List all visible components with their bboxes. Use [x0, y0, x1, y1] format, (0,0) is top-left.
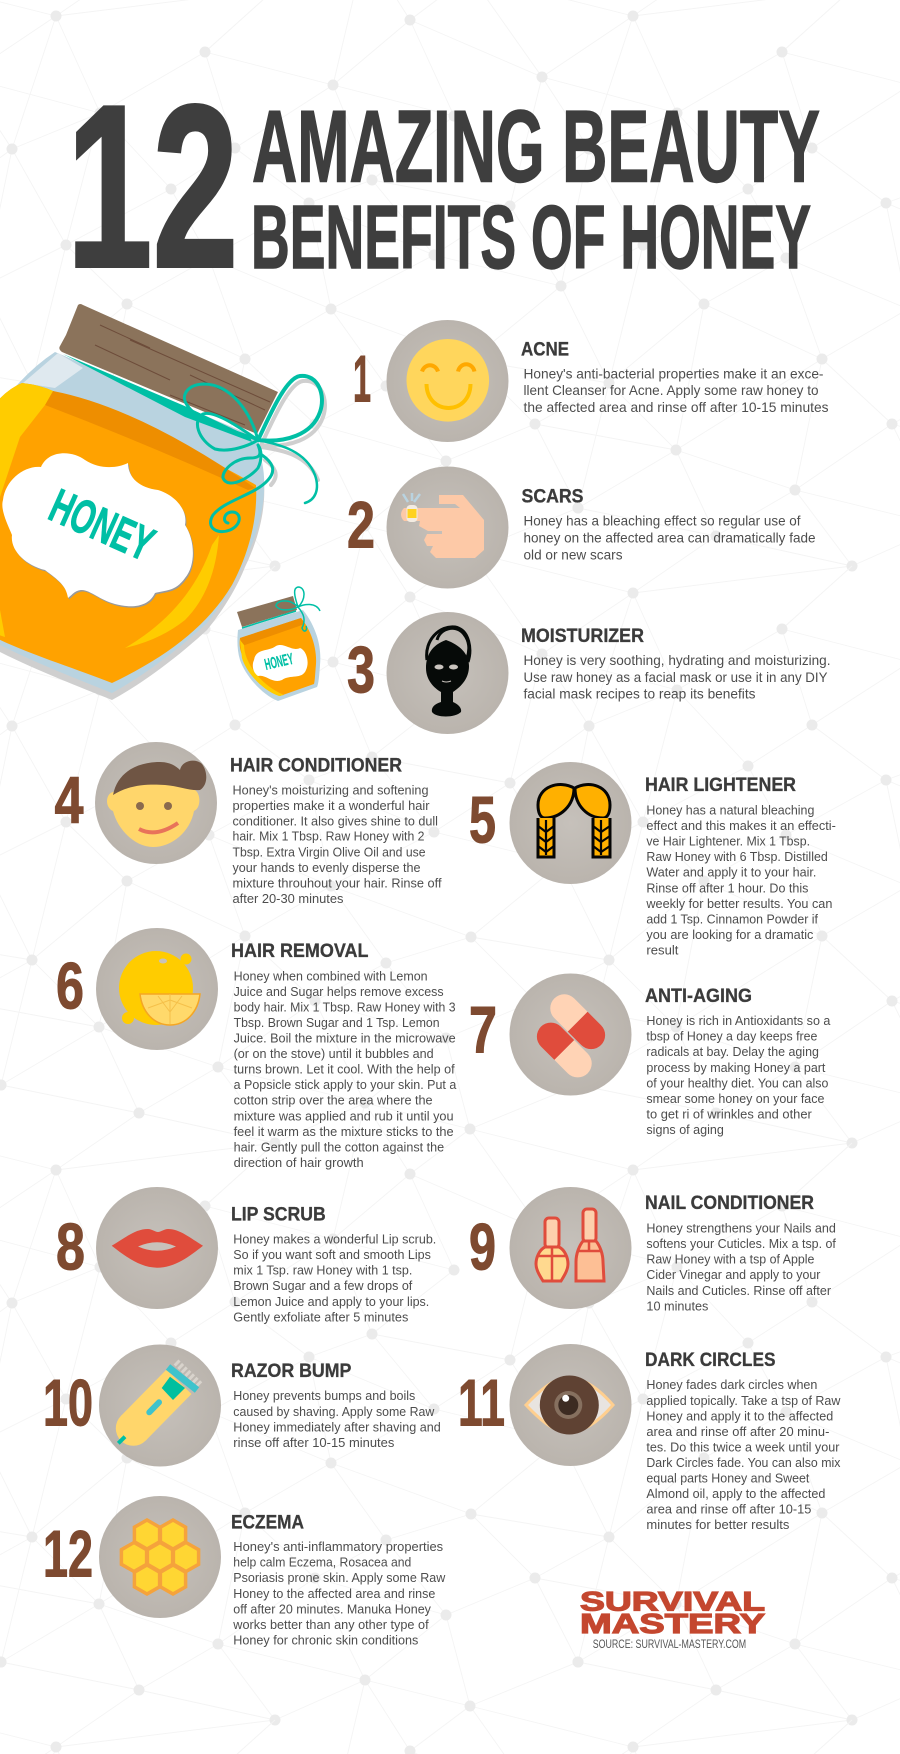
description: scars: old or new scars	[524, 547, 623, 562]
icon: nail polish bottles	[510, 1187, 632, 1309]
description: hair conditioner: Tbsp. Extra Virgin Olive Oil and use	[232, 844, 426, 859]
heading: razor bump: RAZOR BUMP	[231, 1360, 351, 1382]
description: hair removal: Tbsp. Brown Sugar and 1 Tsp. Lemon	[234, 1015, 440, 1030]
description: razor bump: Honey prevents bumps and boils	[233, 1388, 416, 1403]
description: eczema: works better than any other type of	[232, 1617, 429, 1632]
item 7: anti-aging	[469, 974, 831, 1137]
number 5: 5	[469, 782, 496, 856]
illustration: large honey jar	[0, 304, 325, 700]
description: hair removal: turns brown. Let it cool. With the help of	[234, 1062, 455, 1077]
item 1: acne	[353, 320, 829, 442]
icon: pills	[510, 974, 632, 1096]
description: dark circles: Honey and apply it to the affected	[646, 1408, 833, 1423]
icon: razor	[99, 1344, 221, 1466]
description: anti-aging	[646, 1013, 831, 1137]
description: hair lightener: add 1 Tsp. Cinnamon Powder if	[646, 911, 818, 926]
description: hair conditioner: properties make it a wonderful hair	[232, 798, 430, 813]
description: anti-aging: to get ri of wrinkles and other	[646, 1106, 812, 1121]
description: dark circles: area and rinse off after 10-15	[646, 1502, 811, 1517]
description: hair lightener: effect and this makes it an effecti-	[646, 818, 836, 833]
description: eczema: Honey to the affected area and rinse	[233, 1586, 435, 1601]
title	[66, 58, 820, 316]
icon: honeycomb	[99, 1496, 221, 1618]
number 2: 2	[347, 488, 375, 562]
item 12: eczema	[43, 1496, 446, 1648]
description: hair lightener: Rinse off after 1 hour. Do this	[646, 880, 809, 895]
number 4: 4	[54, 762, 84, 836]
description: hair removal: direction of hair growth	[234, 1155, 364, 1170]
heading: eczema: ECZEMA	[231, 1511, 304, 1533]
illustration: small honey jar	[237, 587, 320, 701]
description: dark circles: tes. Do this twice a week until your	[646, 1439, 840, 1454]
description: hair removal: cotton strip over the area where the	[234, 1093, 433, 1108]
illustration: small honey jar: HONEY	[263, 651, 295, 674]
description: anti-aging: radicals at bay. Delay the aging	[646, 1044, 819, 1059]
description: moisturizer: facial mask recipes to reap its benefits	[524, 687, 756, 702]
description: dark circles: area and rinse off after 20 minu-	[646, 1424, 829, 1439]
jar label	[2, 453, 194, 608]
item 3: moisturizer	[347, 612, 830, 734]
description: eczema: help calm Eczema, Rosacea and	[233, 1555, 411, 1570]
number 10: 10	[43, 1366, 93, 1440]
description: hair removal: a Popsicle stick apply to your skin. Put a	[234, 1077, 457, 1092]
description: hair lightener: Honey has a natural bleaching	[646, 802, 814, 818]
description: anti-aging: signs of aging	[646, 1122, 724, 1137]
description: hair removal: hair. Gently pull the cotton against the	[234, 1139, 444, 1154]
description: hair lightener: result	[646, 942, 679, 958]
item 11: dark circles	[458, 1344, 841, 1532]
description: nail conditioner: Nails and Cuticles. Rinse off after	[646, 1283, 832, 1298]
description: eczema	[232, 1539, 446, 1648]
description: hair removal: mixture was applied and rub it until you	[234, 1108, 454, 1123]
heading: lip scrub: LIP SCRUB	[231, 1203, 326, 1225]
description: hair conditioner: your hands to evenly disperse the	[232, 860, 420, 875]
description: nail conditioner: Cider Vinegar and apply to your	[646, 1267, 821, 1282]
item 4: hair conditioner	[54, 742, 442, 906]
description: acne: Honey's anti-bacterial properties make it an exce-	[524, 366, 824, 381]
description: lip scrub	[233, 1231, 436, 1324]
description: hair conditioner: Honey's moisturizing and softening	[232, 782, 428, 797]
description: acne: the affected area and rinse off after 10-15 minutes	[524, 400, 829, 415]
description: anti-aging: process by making Honey a part	[646, 1060, 826, 1075]
number 11: 11	[458, 1366, 505, 1440]
description: razor bump: caused by shaving. Apply some Raw	[233, 1404, 435, 1419]
number 8: 8	[56, 1210, 85, 1284]
title: 12	[66, 58, 238, 316]
heading: nail conditioner: NAIL CONDITIONER	[645, 1192, 814, 1214]
description: razor bump: Honey immediately after shaving and	[233, 1419, 441, 1434]
description: anti-aging: of your healthy diet. You can also	[646, 1075, 828, 1090]
source line: SOURCE: SURVIVAL-MASTERY.COM	[593, 1639, 746, 1651]
description: lip scrub: Honey makes a wonderful Lip scrub.	[233, 1231, 436, 1246]
description: moisturizer: Use raw honey as a facial mask or use it in any DIY	[524, 670, 828, 685]
description: hair lightener: Water and apply it to your hair.	[646, 865, 816, 880]
description: dark circles: applied topically. Take a tsp of Raw	[646, 1393, 841, 1408]
item 8: lip scrub	[56, 1187, 436, 1324]
icon: face mask and towel	[386, 612, 508, 734]
description: dark circles: Dark Circles fade. You can also mix	[646, 1455, 841, 1470]
item 2: scars	[347, 466, 816, 588]
description: scars	[524, 514, 816, 562]
icon: lemon	[96, 928, 218, 1050]
description: dark circles: minutes for better results	[646, 1517, 790, 1532]
description: nail conditioner: Honey strengthens your Nails and	[646, 1220, 836, 1235]
description: hair removal: (or on the stove) until it bubbles and	[234, 1046, 434, 1061]
description: hair conditioner: conditioner. It also gives shine to dull	[232, 813, 438, 828]
description: dark circles	[646, 1377, 841, 1532]
ribbon	[184, 376, 325, 532]
description: hair removal	[234, 968, 457, 1170]
logo: survival mastery: SURVIVAL	[580, 1587, 765, 1617]
description: nail conditioner: Raw Honey with a tsp of Apple	[646, 1252, 814, 1267]
description: hair lightener: you are looking for a dramatic	[646, 927, 814, 942]
description: acne: llent Cleanser for Acne. Apply some raw honey to	[524, 383, 819, 398]
heading: hair conditioner: HAIR CONDITIONER	[230, 754, 402, 776]
icon: lips	[96, 1187, 218, 1309]
item 1: acne: 1	[353, 342, 371, 416]
icon: hand with bandage	[386, 466, 508, 588]
description: scars: Honey has a bleaching effect so regular use of	[524, 514, 801, 528]
description: moisturizer: Honey is very soothing, hydrating and moisturizing.	[524, 653, 830, 668]
description: hair conditioner: mixture throuhout your hair. Rinse off	[232, 875, 442, 890]
number 9: 9	[469, 1210, 496, 1284]
heading: hair lightener: HAIR LIGHTENER	[645, 774, 796, 796]
icon: boy face	[95, 742, 217, 864]
icon: eye	[510, 1344, 632, 1466]
description: anti-aging: tbsp of Honey a day keeps free	[646, 1029, 817, 1044]
description: hair removal: feel it warm as the mixture sticks to the	[234, 1124, 454, 1139]
description: lip scrub: Gently exfoliate after 5 minutes	[233, 1309, 409, 1324]
description: eczema: Honey for chronic skin conditions	[233, 1633, 419, 1648]
heading: scars: SCARS	[522, 485, 584, 507]
description: dark circles: Honey fades dark circles when	[646, 1377, 817, 1392]
heading: hair removal: HAIR REMOVAL	[231, 940, 369, 962]
logo: survival mastery: MASTERY	[580, 1608, 765, 1639]
number 7: 7	[469, 992, 497, 1066]
description: lip scrub: So if you want soft and smooth Lips	[233, 1247, 431, 1262]
description: hair removal: Juice and Sugar helps remove excess	[234, 984, 444, 999]
heading: dark circles: DARK CIRCLES	[645, 1349, 776, 1371]
number 12: 12	[43, 1516, 93, 1590]
item 5: hair lightener	[469, 762, 836, 958]
heading: moisturizer: MOISTURIZER	[521, 625, 644, 647]
description: hair lightener: weekly for better results. You can	[645, 896, 832, 911]
icon: braids	[510, 762, 632, 884]
description: lip scrub: Lemon Juice and apply to your lips.	[233, 1294, 429, 1309]
description: eczema: Honey's anti-inflammatory properties	[233, 1539, 444, 1554]
description: lip scrub: mix 1 Tsp. raw Honey with 1 tsp.	[233, 1263, 412, 1278]
description: hair removal: Juice. Boil the mixture in the microwave	[234, 1030, 456, 1046]
item 9: nail conditioner	[469, 1187, 836, 1313]
description: moisturizer	[524, 653, 830, 702]
description: scars: honey on the affected area can dramatically fade	[524, 530, 816, 545]
description: eczema: Psoriasis prone skin. Apply some Raw	[233, 1570, 446, 1585]
icon: smiling face	[386, 320, 508, 442]
description: nail conditioner	[646, 1220, 836, 1313]
number 6: 6	[56, 948, 84, 1022]
item 10: razor bump	[43, 1344, 441, 1466]
description: razor bump	[233, 1388, 441, 1450]
description: hair removal: body hair. Mix 1 Tbsp. Raw Honey with 3	[234, 999, 456, 1014]
description: hair conditioner: hair. Mix 1 Tbsp. Raw Honey with 2	[232, 829, 424, 844]
description: razor bump: rinse off after 10-15 minutes	[233, 1435, 395, 1450]
jar lid	[59, 304, 278, 442]
description: hair lightener: ve Hair Lightener. Mix 1 Tbsp.	[646, 834, 810, 849]
heading: acne: ACNE	[521, 338, 569, 360]
description: nail conditioner: 10 minutes	[646, 1298, 709, 1313]
description: hair lightener	[645, 802, 836, 958]
description: eczema: off after 20 minutes. Manuka Honey	[233, 1601, 431, 1616]
description: hair conditioner: after 20-30 minutes	[232, 891, 344, 906]
description: anti-aging: smear some honey on your face	[646, 1091, 824, 1106]
description: hair removal: Honey when combined with Lemon	[234, 968, 428, 983]
heading: anti-aging: ANTI-AGING	[645, 985, 752, 1007]
item 6: hair removal	[56, 928, 457, 1170]
description: hair lightener: Raw Honey with 6 Tbsp. Distilled	[646, 849, 828, 864]
jar label: HONEY	[42, 480, 162, 572]
number 3: 3	[347, 632, 375, 706]
description: lip scrub: Brown Sugar and a few drops of	[233, 1278, 413, 1293]
description: anti-aging: Honey is rich in Antioxidants so a	[646, 1013, 831, 1028]
description: dark circles: Almond oil, apply to the affected	[646, 1486, 825, 1501]
description: acne	[524, 366, 829, 415]
description: nail conditioner: softens your Cuticles. Mix a tsp. of	[646, 1236, 836, 1251]
description: dark circles: equal parts Honey and Sweet	[646, 1471, 810, 1486]
logo: survival mastery	[580, 1587, 765, 1651]
description: hair conditioner	[232, 782, 442, 906]
